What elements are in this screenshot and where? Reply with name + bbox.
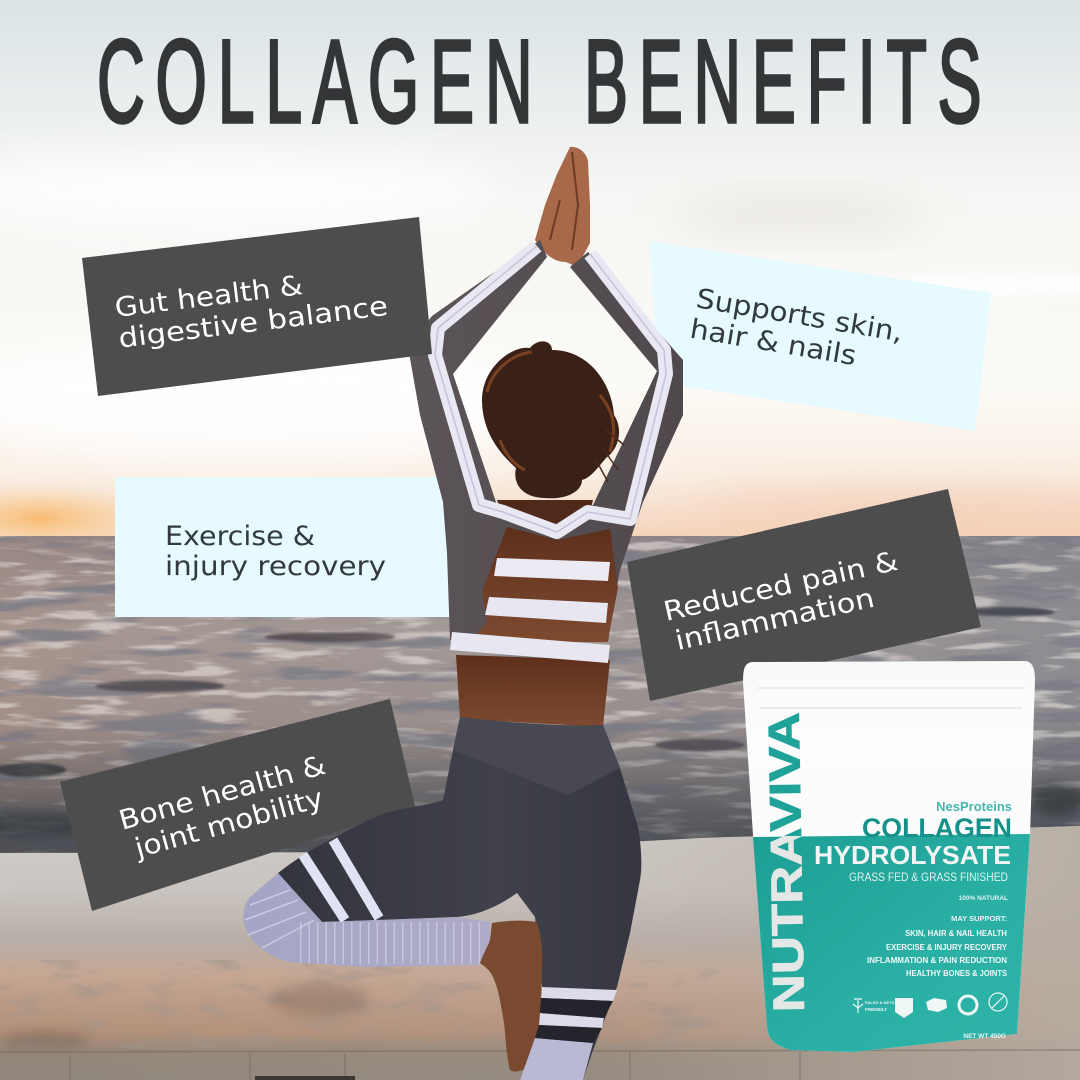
white back bands <box>494 558 610 581</box>
panel: reduced pain: inflammation <box>672 583 877 657</box>
panel: reduced pain: Reduced pain & <box>661 546 901 628</box>
brand name upper half: NUTRAVIVA <box>760 712 814 1013</box>
tucked foot <box>480 921 542 1072</box>
teal lower section <box>753 834 1030 1052</box>
brand name lower half: NUTRAVIVA <box>760 712 814 1013</box>
product text: SKIN, HAIR & NAIL HEALTH <box>905 929 1007 938</box>
panel: gut health: digestive balance <box>117 291 390 355</box>
panel: supports skin, hair and nails: hair & nails <box>688 314 859 372</box>
sky <box>0 0 1080 554</box>
paleo and keto label: FRIENDLY <box>865 1007 887 1012</box>
white arm and neckline stripe <box>435 246 666 532</box>
paleo and keto label: PALEO & KETO <box>865 1000 895 1005</box>
panel: gut health: Gut health & <box>113 270 304 324</box>
product text: NET WT 450G <box>963 1033 1006 1040</box>
panel: exercise and injury recovery: Exercise & <box>165 521 315 552</box>
panel: supports skin, hair and nails <box>650 241 991 431</box>
head and hair <box>482 341 624 498</box>
woman in yoga tree pose <box>243 147 683 1080</box>
panel: bone health: Bone health & <box>116 750 329 837</box>
boardwalk deck <box>0 826 1080 1080</box>
panel: supports skin, hair and nails: Supports skin, <box>694 283 905 348</box>
product text: HEALTHY BONES & JOINTS <box>906 969 1008 978</box>
hands in prayer <box>535 147 590 267</box>
title word: collagen: COLLAGEN <box>97 16 533 148</box>
waist <box>456 655 610 727</box>
panel: bone health: joint mobility <box>131 783 327 865</box>
panel: reduced pain <box>627 489 981 701</box>
product pouch <box>743 661 1035 1052</box>
sea <box>0 536 1080 856</box>
legging waistband <box>453 717 620 795</box>
product text <box>814 799 1012 1040</box>
bent lower leg <box>243 873 490 967</box>
bare back <box>470 527 618 642</box>
certification icons <box>853 993 1007 1018</box>
ankle stripes <box>520 987 617 1080</box>
neck and shoulders skin <box>497 500 593 532</box>
product text: 100% NATURAL <box>959 895 1008 902</box>
title word: benefits: BENEFITS <box>584 16 982 148</box>
title <box>97 16 982 148</box>
sleeves and upper torso <box>408 240 683 640</box>
panel: gut health <box>82 217 432 396</box>
product text: GRASS FED & GRASS FINISHED <box>849 872 1008 884</box>
pouch body <box>743 661 1035 1052</box>
panel: bone health <box>60 699 415 911</box>
panel: exercise and injury recovery <box>115 477 470 617</box>
leggings <box>278 717 641 1080</box>
panel: exercise and injury recovery: injury recovery <box>165 551 386 582</box>
product text: HYDROLYSATE <box>814 840 1011 870</box>
product text: MAY SUPPORT: <box>951 914 1007 923</box>
thigh stripes <box>303 840 379 920</box>
pouch seal lines <box>758 688 1024 708</box>
product text: COLLAGEN <box>862 813 1012 843</box>
product text: EXERCISE & INJURY RECOVERY <box>886 943 1008 952</box>
paleo and keto label <box>865 1000 895 1012</box>
product text: INFLAMMATION & PAIN REDUCTION <box>867 956 1007 965</box>
product text: NesProteins <box>936 799 1012 814</box>
